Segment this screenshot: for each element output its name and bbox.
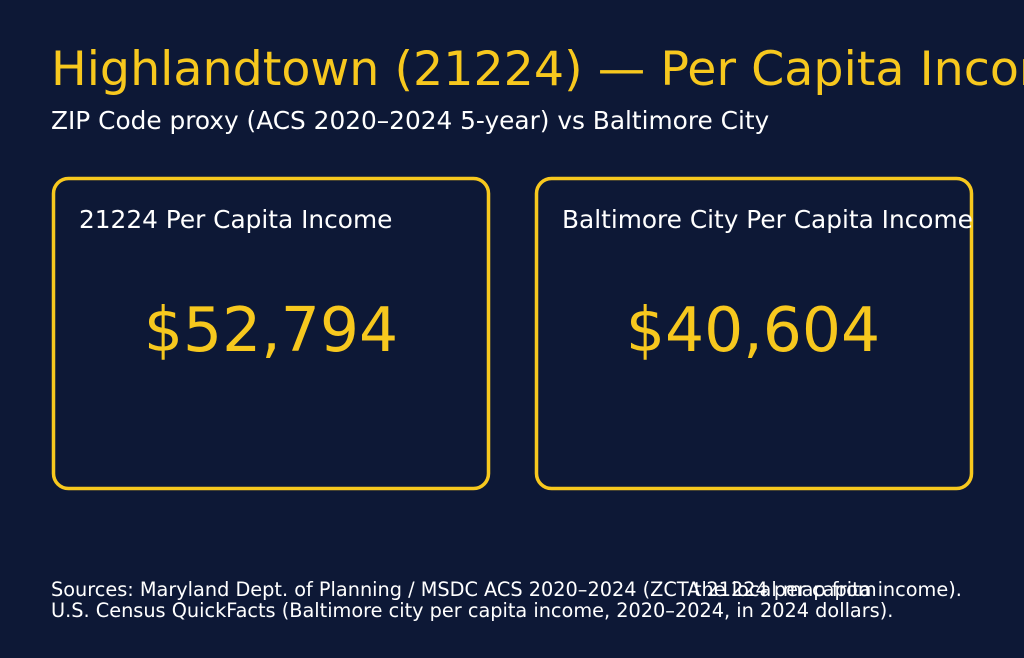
footer sources: Sources: Maryland Dept. of Planning / MSDC ACS 2020–2024 (ZCTA 21224 per capita income).: [51, 578, 962, 601]
value: Baltimore: $40,604: [626, 294, 880, 366]
panel: 21224: [54, 178, 488, 488]
card title: Baltimore: Baltimore City Per Capita Income: [562, 205, 973, 234]
footer sources: the local map from: [694, 578, 877, 601]
footer sources: U.S. Census QuickFacts (Baltimore city per capita income, 2020–2024, in 2024 dollars).: [51, 599, 893, 622]
card title: 21224: 21224 Per Capita Income: [79, 205, 392, 234]
panel: Baltimore City: [536, 178, 973, 488]
value: 21224: $52,794: [144, 294, 398, 366]
footer sources: [51, 578, 962, 622]
subtitle: ZIP Code proxy (ACS 2020–2024 5-year) vs Baltimore City: [51, 106, 769, 135]
